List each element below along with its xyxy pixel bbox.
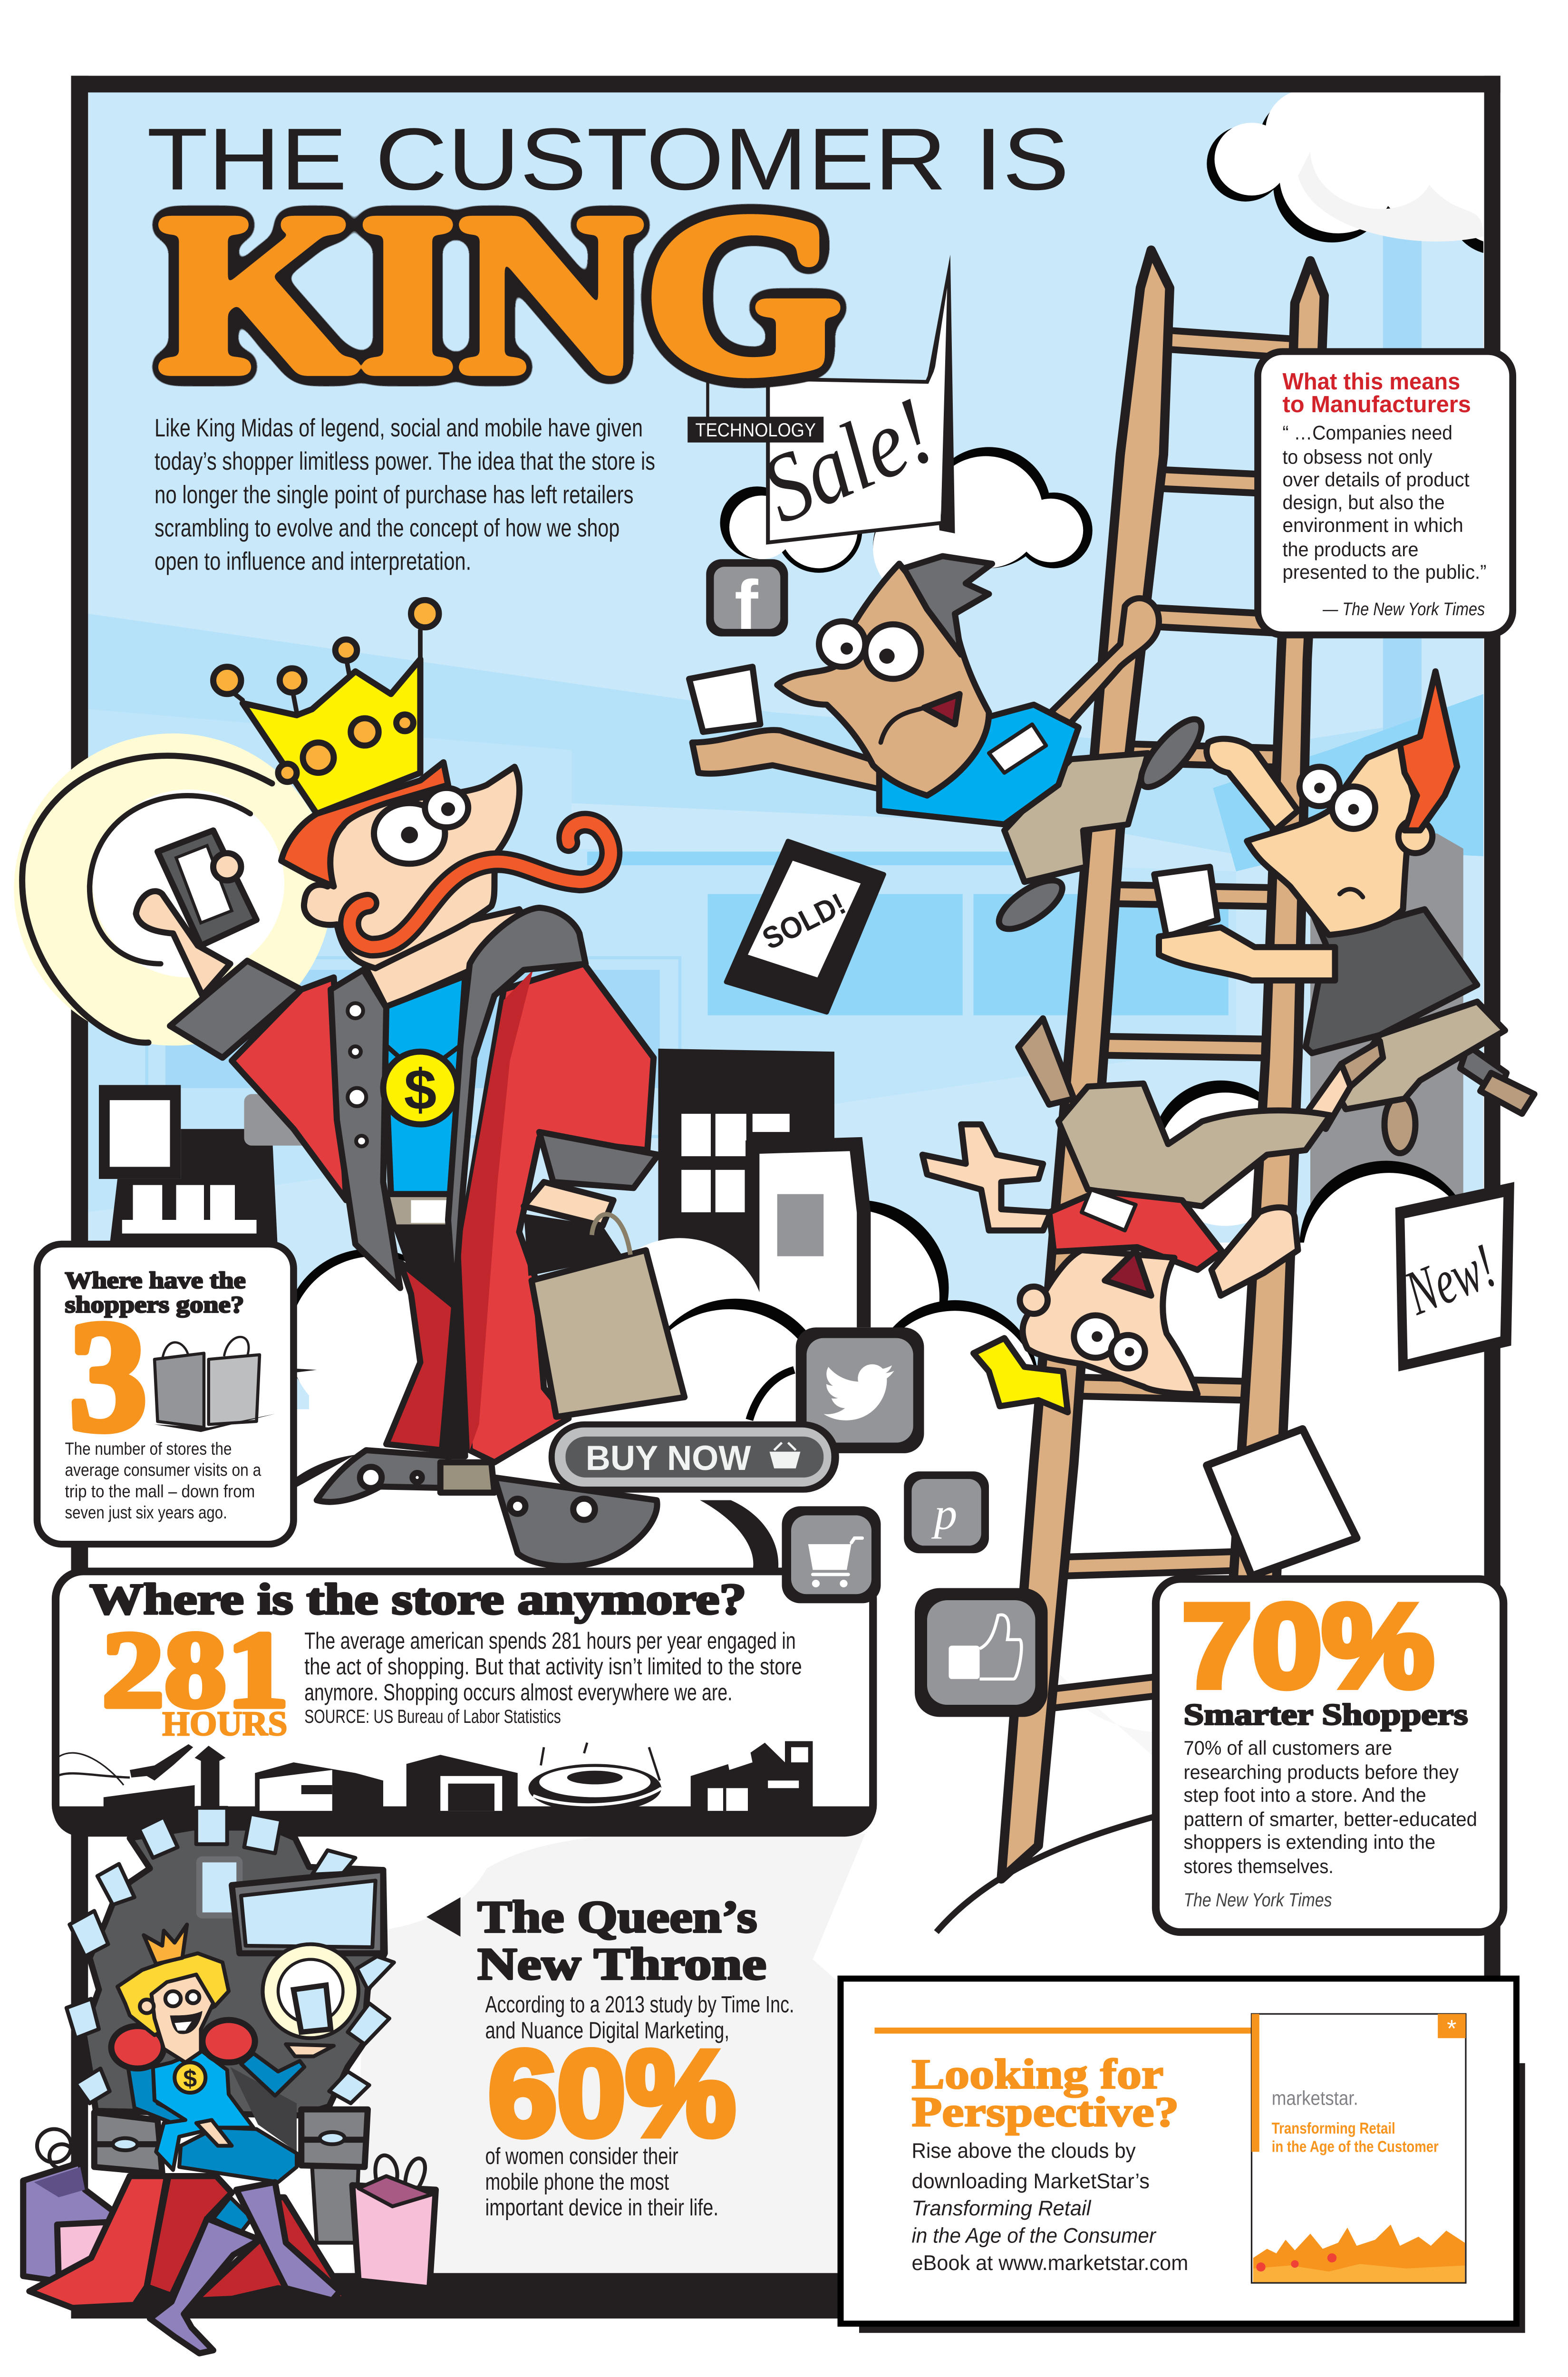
heading: the queen's new throne: The Queen’s <box>477 1892 757 1942</box>
sleeve <box>232 977 346 1200</box>
big number 281: 281 <box>102 1609 289 1730</box>
technology tag: TECHNOLOGY <box>695 419 816 441</box>
body text <box>65 1439 261 1522</box>
head <box>1023 1250 1198 1394</box>
book cover: marketstar. <box>1272 2087 1358 2109</box>
character: man in gray shirt <box>1154 671 1534 1153</box>
panel: what this means to manufacturers <box>1258 352 1513 635</box>
heading: Looking for <box>911 2051 1163 2097</box>
neck <box>355 909 533 1008</box>
paper <box>689 667 760 732</box>
medallion <box>383 1045 460 1124</box>
heading: Where is the store anymore? <box>89 1575 746 1624</box>
button: buy now <box>549 1421 839 1493</box>
icon: shopping bags <box>155 1337 275 1432</box>
heading <box>65 1267 246 1317</box>
right shoe <box>494 1478 657 1566</box>
ladder <box>936 250 1356 1932</box>
medallion <box>174 2062 205 2093</box>
bottom band <box>52 1807 876 1836</box>
phone <box>157 831 256 946</box>
character: upside-down man in red <box>922 1018 1383 1412</box>
quote: the products are <box>1282 538 1418 560</box>
panel: where is the store anymore <box>52 1571 876 1836</box>
head <box>151 1974 213 2062</box>
cloud: behind Sale sign <box>720 447 1093 601</box>
panel: sky background <box>88 92 1483 1409</box>
heading: to Manufacturers <box>1282 391 1471 417</box>
heading: the queen's new throne <box>426 1892 766 1989</box>
heading: the queen's new throne: New Throne <box>477 1939 766 1989</box>
text block: 60% statistic <box>485 1991 794 2221</box>
arm <box>241 2053 304 2096</box>
dress <box>213 2197 252 2232</box>
tablet <box>199 1859 240 1915</box>
body text: Transforming Retail <box>911 2196 1092 2220</box>
icon: thumbs up <box>915 1588 1047 1717</box>
text block: 60% statistic: According to a 2013 study by Time Inc. <box>485 1991 794 2018</box>
arms <box>1207 739 1298 831</box>
book cover: Transforming Retail <box>1272 2119 1395 2137</box>
body text <box>304 1627 802 1727</box>
body text: researching products before they <box>1183 1761 1459 1783</box>
bag <box>524 1214 685 1417</box>
icon: facebook <box>706 559 788 644</box>
icon: basket <box>769 1443 800 1469</box>
hair <box>281 762 448 887</box>
body text: in the Age of the Consumer <box>911 2223 1157 2247</box>
body text: 70% of all customers are <box>1183 1737 1392 1759</box>
body text: anymore. Shopping occurs almost everywhere we are. <box>304 1679 732 1705</box>
icon: twitter <box>796 1327 924 1453</box>
armrests <box>94 2112 162 2173</box>
foot <box>1018 1018 1074 1105</box>
hair <box>904 556 992 655</box>
forearm <box>524 1182 613 1226</box>
eyes <box>374 803 445 864</box>
right arm <box>1051 598 1159 725</box>
medallion: $ <box>183 2065 197 2092</box>
small crown <box>144 1924 187 1964</box>
shoes <box>1132 711 1211 795</box>
text block: 60% statistic: and Nuance Digital Marketing, <box>485 2017 729 2043</box>
heading <box>911 2051 1179 2135</box>
body text: The number of stores the <box>65 1439 232 1459</box>
panel: looking for perspective <box>841 1979 1525 2333</box>
quote: to obsess not only <box>1282 446 1432 468</box>
book cover <box>1251 2014 1466 2283</box>
white tower <box>753 1144 864 1327</box>
floating tablets <box>67 1808 394 2103</box>
icon: facebook: f <box>735 566 758 644</box>
hill line <box>936 1816 1159 1932</box>
hair <box>1400 671 1457 831</box>
crown <box>973 1338 1068 1412</box>
text block: 60% statistic: of women consider their <box>485 2143 678 2169</box>
hours label: HOURS <box>162 1704 287 1743</box>
hand and arm <box>1159 928 1335 980</box>
robe lower panel <box>386 1262 454 1450</box>
halo <box>14 734 332 1045</box>
heading: What this means <box>1282 368 1460 395</box>
body text: SOURCE: US Bureau of Labor Statistics <box>304 1706 561 1727</box>
hair <box>117 1953 229 2035</box>
body text: seven just six years ago. <box>65 1502 227 1522</box>
SOLD phone: SOLD! <box>757 887 851 956</box>
shirt <box>1049 1191 1222 1270</box>
left shoe <box>317 1450 451 1502</box>
shirt <box>1298 879 1477 1053</box>
TV <box>232 1870 383 1953</box>
legs <box>1460 1045 1507 1094</box>
belt <box>386 1194 457 1227</box>
body text: average consumer visits on a <box>65 1460 261 1480</box>
book cover: * <box>1447 2015 1456 2042</box>
source: The New York Times <box>1183 1889 1332 1911</box>
quote: over details of product <box>1282 469 1470 491</box>
cloud: top right <box>1207 92 1483 253</box>
quote <box>1282 422 1486 583</box>
paper <box>1154 867 1218 937</box>
body text: The average american spends 281 hours per year engaged in <box>304 1627 796 1654</box>
body text: shoppers is extending into the <box>1183 1831 1435 1853</box>
shirt <box>879 705 1078 824</box>
mustache <box>349 822 611 947</box>
quote: design, but also the <box>1282 491 1445 513</box>
sign: Sale! <box>687 255 955 544</box>
body text <box>911 2138 1188 2275</box>
right rail <box>1233 261 1324 1584</box>
panel: smarter shoppers <box>1156 1579 1503 1932</box>
book cover: in the Age of the Customer <box>1272 2138 1439 2155</box>
sign text: Sale! <box>746 376 949 544</box>
collar puffs <box>111 2026 164 2068</box>
heading: Where have the <box>65 1267 246 1293</box>
quote: presented to the public.” <box>1282 561 1486 583</box>
title: THE CUSTOMER IS <box>147 110 1069 208</box>
character: man in blue shirt <box>689 556 1211 938</box>
pants <box>396 1226 465 1456</box>
left rail <box>1001 250 1170 1879</box>
KING wordmark: KING <box>157 166 843 421</box>
medallion: $ <box>404 1057 436 1121</box>
big number: 70% <box>1182 1580 1434 1712</box>
heading: Smarter Shoppers <box>1183 1698 1468 1731</box>
body text: Rise above the clouds by <box>911 2138 1136 2163</box>
icon: cart <box>782 1506 881 1603</box>
body text: the act of shopping. But that activity isn’t limited to the store <box>304 1653 802 1680</box>
placket and buttons <box>330 970 400 1288</box>
head <box>1247 744 1414 935</box>
right arm <box>1211 1208 1298 1295</box>
body text: trip to the mall – down from <box>65 1481 255 1501</box>
heading: Perspective? <box>911 2089 1179 2135</box>
body text: downloading MarketStar’s <box>911 2169 1150 2193</box>
head <box>304 767 520 968</box>
cape <box>29 2176 167 2308</box>
sign: New!: New! <box>1395 1230 1505 1329</box>
intro text: scrambling to evolve and the concept of how we shop <box>155 514 619 542</box>
boots <box>236 2182 340 2300</box>
building: left silhouette <box>99 1085 309 1258</box>
body text: step foot into a store. And the <box>1183 1784 1426 1806</box>
body text: stores themselves. <box>1183 1855 1334 1877</box>
body text <box>1183 1737 1477 1877</box>
collar <box>448 908 586 1306</box>
big number: 60% <box>488 2026 736 2161</box>
intro text <box>155 414 655 575</box>
hand <box>136 891 230 995</box>
left arm <box>692 730 889 791</box>
big number 3: 3 <box>69 1289 147 1463</box>
text block: 60% statistic: important device in their life. <box>485 2194 718 2221</box>
heading <box>1282 368 1471 417</box>
right robe <box>460 964 654 1462</box>
text block: 60% statistic: mobile phone the most <box>485 2168 669 2195</box>
crown <box>213 600 439 814</box>
SOLD phone <box>726 841 884 1012</box>
shopping bags <box>23 2129 436 2288</box>
sign: New! <box>1395 1182 1514 1372</box>
left arm <box>922 1124 1051 1230</box>
throne <box>83 1827 385 2116</box>
building: right silhouette <box>658 1049 834 1318</box>
source: — The New York Times <box>1322 599 1485 619</box>
head <box>777 564 989 795</box>
pants <box>1058 1083 1330 1206</box>
body text: pattern of smarter, better-educated <box>1183 1808 1477 1830</box>
intro text: Like King Midas of legend, social and mobile have given <box>155 414 643 442</box>
icon: pinterest: p <box>931 1488 957 1539</box>
intro text: today’s shopper limitless power. The idea that the store is <box>155 448 655 475</box>
pants <box>1004 753 1148 882</box>
character: queen on throne <box>23 1808 436 2353</box>
panel: where have the shoppers gone <box>37 1244 293 1544</box>
clouds: lower cloud bank <box>88 1081 1483 2319</box>
title <box>147 110 1069 421</box>
intro text: open to influence and interpretation. <box>155 548 471 575</box>
body text: eBook at www.marketstar.com <box>911 2251 1188 2275</box>
ladder rungs <box>1038 339 1295 1700</box>
skyline silhouettes <box>57 1741 813 1812</box>
quote: “ …Companies need <box>1282 422 1452 444</box>
glowing phone <box>262 1944 358 2038</box>
icon: pinterest <box>904 1471 989 1553</box>
shirt <box>383 976 465 1194</box>
arrow <box>426 1897 460 1937</box>
intro text: no longer the single point of purchase has left retailers <box>155 481 633 509</box>
shorts <box>1336 1002 1505 1109</box>
broken ladder paper <box>1207 1429 1356 1576</box>
splash art <box>1253 2224 1465 2282</box>
heading: shoppers gone? <box>65 1292 244 1317</box>
character: king with phone <box>14 600 685 1566</box>
button: buy now: BUY NOW <box>586 1439 751 1478</box>
quote: environment in which <box>1282 514 1463 536</box>
